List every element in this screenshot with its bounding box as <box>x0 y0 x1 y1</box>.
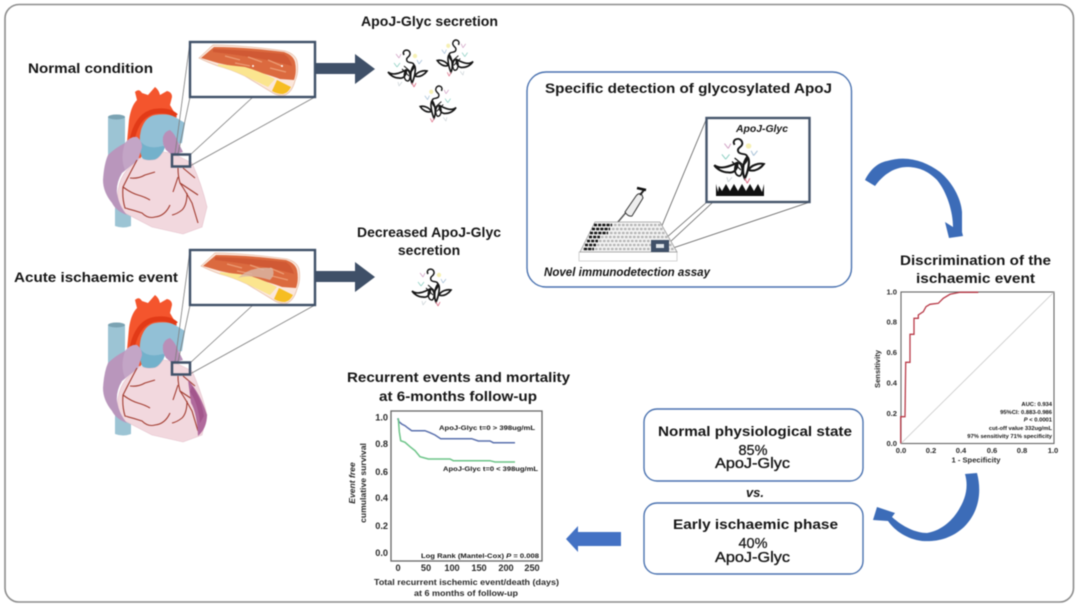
y axis title <box>347 443 368 523</box>
plot area <box>391 411 542 561</box>
y axis labels: 0.0 <box>375 548 388 558</box>
icon: healthy heart <box>103 87 207 234</box>
y axis title: Event free <box>347 462 357 504</box>
y axis labels: 0.8 <box>375 439 388 449</box>
x axis title: at 6 months of follow-up <box>414 588 518 598</box>
panel: early ischaemic phase: 40% <box>738 536 768 552</box>
axis titles <box>873 349 1001 464</box>
y axis labels: 1.0 <box>375 412 388 422</box>
survival curve: low ApoJ-Glyc <box>398 418 515 462</box>
y axis title: cumulative survival <box>358 443 368 523</box>
y axis labels: 0.6 <box>375 467 388 477</box>
x axis labels: 150 <box>471 563 487 573</box>
y axis labels <box>886 288 898 448</box>
x axis labels: 200 <box>498 563 514 573</box>
icon: ischaemic heart <box>103 295 207 442</box>
icon: ApoJ-Glyc proteins <box>388 40 473 122</box>
heading: recurrent events: at 6-months follow-up <box>379 388 537 404</box>
x axis labels: 0.0 <box>896 446 906 455</box>
statistics: P < 0.0001 <box>1024 418 1053 424</box>
x axis labels: 0.2 <box>926 446 936 455</box>
vessel inset with plaque <box>190 250 315 305</box>
icon: single ApoJ-Glyc protein <box>412 269 451 306</box>
ROC curve <box>901 292 978 443</box>
statistics: cut-off value 332ug/mL <box>989 426 1052 432</box>
reference diagonal <box>901 292 1054 444</box>
y axis labels: 0.2 <box>375 521 388 531</box>
axis titles: Sensitivity <box>873 349 882 388</box>
icon: pipette <box>613 188 646 228</box>
panel: early ischaemic phase <box>644 503 863 574</box>
log rank note: Log Rank (Mantel-Cox) P = 0.008 <box>421 553 539 560</box>
label: versus: vs. <box>746 485 764 500</box>
statistics: AUC: 0.934 <box>1021 402 1053 408</box>
panel: ROC chart <box>873 252 1058 464</box>
zoom connector lines <box>175 42 315 166</box>
panel: normal condition <box>28 13 498 234</box>
arrow to secretion <box>315 54 375 84</box>
curve labels: ApoJ-Glyc t=0 < 398ug/mL <box>443 466 538 473</box>
statistics: 95%CI: 0.883-0.986 <box>1000 410 1053 416</box>
survival curve: high ApoJ-Glyc <box>398 418 515 443</box>
heading: ApoJ-Glyc secretion: ApoJ-Glyc secretion <box>361 13 498 29</box>
arrow to decreased secretion <box>315 262 375 292</box>
plot area <box>901 292 1054 444</box>
heart selection box <box>172 154 190 166</box>
heading: normal condition: Normal condition <box>28 60 153 76</box>
panel: normal physiological state: ApoJ-Glyc <box>715 456 790 472</box>
curve labels: ApoJ-Glyc t=0 > 398ug/mL <box>439 425 535 432</box>
heading: recurrent events: Recurrent events and mortality <box>347 369 570 385</box>
y axis labels: 0.4 <box>886 378 898 388</box>
panel border <box>527 72 852 287</box>
heading: recurrent events <box>347 369 570 404</box>
x axis labels: 250 <box>524 563 540 573</box>
y axis labels: 0.2 <box>886 409 897 418</box>
caption: novel assay: Novel immunodetection assay <box>544 265 711 279</box>
curve labels <box>439 425 538 473</box>
y axis labels: 0.4 <box>375 493 389 503</box>
heading: discrimination: ischaemic event <box>916 270 1035 286</box>
x axis labels: 50 <box>421 563 431 573</box>
x axis labels <box>395 563 540 573</box>
panel: survival chart <box>347 369 570 598</box>
panel: early ischaemic phase: ApoJ-Glyc <box>715 550 790 566</box>
panel: acute ischaemic event <box>14 224 501 442</box>
panel: normal physiological state: Normal physiological state <box>658 423 852 439</box>
x axis labels: 0.6 <box>987 446 997 455</box>
y axis labels: 0.6 <box>886 348 897 357</box>
axis titles: 1 - Specificity <box>952 456 1001 464</box>
panel: normal physiological state: 85% <box>738 443 768 459</box>
y axis labels <box>375 412 389 558</box>
heading: discrimination: Discrimination of the <box>900 252 1051 268</box>
arrow: assay to discrimination <box>865 159 963 238</box>
x axis labels: 0 <box>395 563 401 573</box>
y axis labels: 0.8 <box>886 318 897 326</box>
connector lines <box>656 120 810 249</box>
heading: decreased secretion: Decreased ApoJ-Glyc <box>357 224 501 240</box>
y axis labels: 0.0 <box>886 439 897 448</box>
x axis labels: 100 <box>444 563 460 573</box>
panel: detection assay <box>527 72 852 287</box>
heading: acute ischaemic event: Acute ischaemic event <box>14 269 178 285</box>
statistics: 97% sensitivity 71% specificity <box>967 434 1053 440</box>
x axis labels <box>896 446 1058 455</box>
heading: decreased secretion <box>357 224 501 258</box>
x axis labels: 0.4 <box>956 446 967 455</box>
x axis labels: 0.8 <box>1017 446 1027 455</box>
vessel inset <box>190 42 315 97</box>
statistics <box>967 402 1053 440</box>
arrow: ROC to comparison <box>873 473 979 541</box>
x axis labels: 1.0 <box>1048 446 1058 455</box>
panel: early ischaemic phase: Early ischaemic phase <box>673 516 838 532</box>
inset: ApoJ-Glyc capture <box>706 118 810 202</box>
x axis title: Total recurrent ischemic event/death (days) <box>374 577 559 587</box>
heading: discrimination <box>900 252 1051 286</box>
heading: specific detection: Specific detection of glycosylated ApoJ <box>545 80 832 96</box>
y axis labels: 1.0 <box>886 288 897 296</box>
heart selection box <box>172 362 190 374</box>
panel: normal physiological state <box>644 409 863 481</box>
icon: 96-well plate <box>579 222 677 261</box>
zoom connector lines <box>175 250 315 374</box>
x axis title <box>374 577 559 598</box>
arrow: comparison to survival <box>566 526 621 552</box>
heading: decreased secretion: secretion <box>398 242 460 258</box>
inset: ApoJ-Glyc capture: ApoJ-Glyc <box>735 123 788 135</box>
